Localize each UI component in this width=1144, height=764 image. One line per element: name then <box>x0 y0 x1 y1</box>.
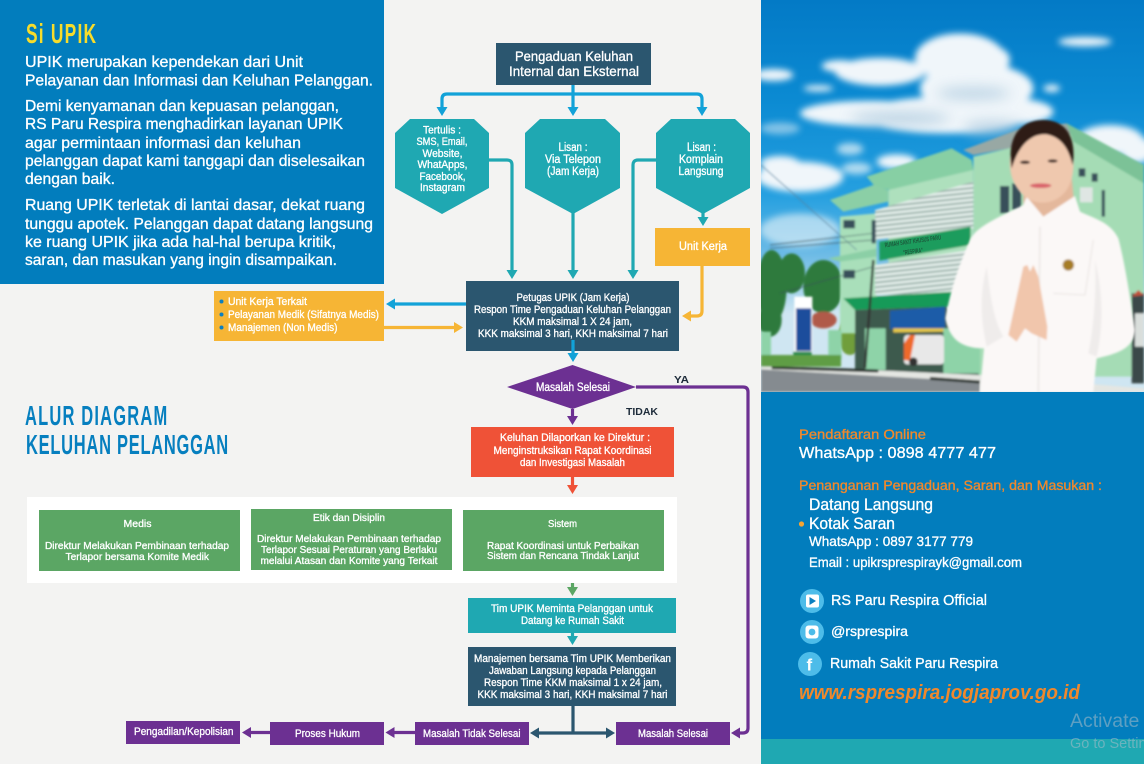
box: Petugas UPIK <box>466 281 679 351</box>
box: Sistem <box>463 510 664 571</box>
box: Petugas UPIK: KKK maksimal 3 hari, KKH maksimal 7 hari <box>478 328 668 340</box>
photo: hospital building and staff member <box>753 0 1144 392</box>
arrows: complaint source branches <box>436 85 708 116</box>
box: Tim UPIK: Tim UPIK Meminta Pelanggan untuk <box>491 603 653 615</box>
arrow: Unit Kerja to officer <box>682 266 702 322</box>
intro text: Demi kenyamanan dan kepuasan pelanggan, <box>25 98 339 115</box>
arrow: officer to decision <box>568 340 578 362</box>
box: Petugas UPIK: KKM maksimal 1 X 24 jam, <box>513 316 632 328</box>
box: Sistem: Rapat Koordinasi untuk Perbaikan <box>487 540 639 552</box>
hexagon: Tertulis: Instagram <box>420 182 465 194</box>
signboard <box>794 297 812 352</box>
box: Masalah Tidak Selesai: Masalah Tidak Selesai <box>423 728 520 740</box>
panel: follow-up categories <box>27 497 677 583</box>
box: Pengadilan/Kepolisian: Pengadilan/Kepolisian <box>134 726 234 738</box>
box: Manajemen bersama Tim UPIK: Jawaban Langsung kepada Pelanggan <box>489 665 656 677</box>
box: Tim UPIK <box>468 598 676 633</box>
hexagon: Lisan via telepon: Lisan : <box>558 142 588 154</box>
box: Pengaduan Keluhan: Pengaduan Keluhan <box>515 48 633 64</box>
box: Proses Hukum <box>270 722 384 745</box>
box: related units list: Pelayanan Medik (Sifatnya Medis) <box>228 309 379 321</box>
contact: complaints handling: WhatsApp : 0897 3177 779 <box>809 533 973 549</box>
box: Unit Kerja: Unit Kerja <box>679 241 728 253</box>
ambulance <box>904 335 944 364</box>
box: Etik dan Disiplin: Terlapor Sesuai Peraturan yang Berlaku <box>261 544 437 556</box>
box: Petugas UPIK: Petugas UPIK (Jam Kerja) <box>516 292 630 304</box>
box: Proses Hukum: Proses Hukum <box>295 728 360 740</box>
arrow: to Proses Hukum <box>386 727 415 738</box>
hexagon: Lisan komplain langsung <box>656 119 750 214</box>
arrow: YA path to Masalah Selesai <box>636 387 748 738</box>
panel: contact information <box>761 392 1144 764</box>
box: Masalah Selesai: Masalah Selesai <box>638 728 708 740</box>
box: Masalah Tidak Selesai <box>415 722 529 745</box>
icon: facebook: f <box>806 656 812 674</box>
poles <box>865 260 873 368</box>
decision: Masalah Selesai <box>507 365 636 409</box>
icon: facebook <box>798 652 822 676</box>
text: facebook: Rumah Sakit Paru Respira <box>830 655 999 672</box>
intro text <box>25 54 373 269</box>
box: Etik dan Disiplin: Etik dan Disiplin <box>313 512 385 524</box>
contact: complaints handling <box>799 477 1102 570</box>
box: Medis: Medis <box>124 518 152 530</box>
arrow: to Pengadilan <box>242 727 270 738</box>
road <box>761 365 1144 392</box>
heading: Alur Diagram Keluhan Pelanggan: ALUR DIAGRAM <box>25 400 167 431</box>
hexagon: Lisan komplain langsung: Komplain <box>679 154 723 166</box>
intro text: Pelayanan dan Informasi dan Keluhan Pelanggan. <box>25 72 373 90</box>
box: Pengadilan/Kepolisian <box>126 721 240 744</box>
intro text: dengan baik. <box>25 171 115 188</box>
icon: instagram <box>800 620 824 644</box>
box: Etik dan Disiplin: Direktur Melakukan Pembinaan terhadap <box>257 533 441 545</box>
building <box>761 123 1144 392</box>
panel: Si UPIK intro <box>0 0 384 284</box>
hexagon: Lisan komplain langsung: Lisan : <box>687 142 716 154</box>
box: Keluhan Dilaporkan ke Direktur <box>471 427 674 477</box>
intro text: saran, dan masukan yang ingin disampaikan. <box>25 252 337 269</box>
photo: hospital building and staff member: RUMAH SAKIT KHUSUS PARU <box>884 234 942 249</box>
box: Manajemen bersama Tim UPIK <box>468 647 676 706</box>
hexagon: Tertulis: WhatApps, <box>418 159 468 171</box>
hexagon: Lisan komplain langsung: Langsung <box>678 166 724 178</box>
photo: hospital building and staff member: "RESPIRA" <box>903 247 923 257</box>
heading: Si UPIK: Si UPIK <box>26 18 96 49</box>
intro text: RS Paru Respira menghadirkan layanan UPIK <box>25 116 343 133</box>
box: Masalah Selesai <box>616 722 730 745</box>
box: Keluhan Dilaporkan ke Direktur: dan Investigasi Masalah <box>520 457 625 469</box>
box: Medis: Terlapor bersama Komite Medik <box>66 551 210 563</box>
hexagon: Tertulis: Website, <box>422 148 462 160</box>
label: YA: YA <box>674 374 689 386</box>
hexagon: Tertulis: Facebook, <box>420 171 466 183</box>
arrow: report to follow-up <box>567 477 578 494</box>
hexagon: Tertulis: SMS, Email, <box>416 136 468 148</box>
arrow: UPIK team to management <box>567 633 578 645</box>
intro text: Ruang UPIK terletak di lantai dasar, dekat ruang <box>25 197 365 214</box>
box: related units list: Unit Kerja Terkait <box>228 296 307 308</box>
box: related units list: Manajemen (Non Medis) <box>228 322 338 334</box>
website link: www.rsprespira.jogjaprov.go.id <box>799 682 1081 704</box>
arrow: related units to officer <box>384 322 463 333</box>
box: Etik dan Disiplin: melalui Atasan dan Komite yang Terkait <box>260 555 438 567</box>
arrows: outcome split <box>530 706 615 738</box>
intro text: tunggu apotek. Pelanggan dapat datang langsung <box>25 216 373 233</box>
box: Sistem: Sistem <box>548 518 577 530</box>
watermark: activate windows <box>1070 713 1144 748</box>
contact: complaints handling: Datang Langsung <box>809 496 933 514</box>
heading: Alur Diagram Keluhan Pelanggan: KELUHAN PELANGGAN <box>26 429 228 460</box>
arrows: channels to UPIK officer <box>489 160 708 279</box>
contact: complaints handling: Email : upikrsprespirayk@gmail.com <box>809 555 1022 570</box>
box: Medis <box>39 510 240 571</box>
box: Pengaduan Keluhan <box>496 43 651 85</box>
contact: online registration: Pendaftaran Online <box>799 426 926 442</box>
box: Pengaduan Keluhan: Internal dan Eksternal <box>509 63 639 79</box>
box: Tim UPIK: Datang ke Rumah Sakit <box>521 615 624 627</box>
box: Keluhan Dilaporkan ke Direktur: Keluhan Dilaporkan ke Direktur : <box>500 432 650 444</box>
windows and details <box>843 168 1105 278</box>
box: Unit Kerja <box>655 228 750 266</box>
box: Manajemen bersama Tim UPIK: KKK maksimal 3 hari, KKH maksimal 7 hari <box>478 689 668 701</box>
contact: complaints handling: Penanganan Pengaduan, Saran, dan Masukan : <box>799 477 1102 493</box>
icon: video channel <box>800 589 824 613</box>
arrow: categories to UPIK team <box>567 583 578 596</box>
hexagon: Tertulis: Tertulis : <box>423 124 461 136</box>
trees <box>757 250 862 355</box>
intro text: agar permintaan informasi dan keluhan <box>25 135 301 152</box>
box: Petugas UPIK: Respon Time Pengaduan Keluhan Pelanggan <box>474 304 671 316</box>
text: instagram: @rsprespira <box>831 624 909 639</box>
heading: Alur Diagram Keluhan Pelanggan <box>25 400 228 460</box>
label: TIDAK: TIDAK <box>626 406 658 418</box>
box: Etik dan Disiplin <box>251 509 452 570</box>
decision: Masalah Selesai: Masalah Selesai <box>536 382 610 394</box>
box: Manajemen bersama Tim UPIK: Manajemen bersama Tim UPIK Memberikan <box>474 653 671 665</box>
box: Manajemen bersama Tim UPIK: Respon Time KKM maksimal 1 x 24 jam, <box>484 677 662 689</box>
hexagon: Lisan via telepon <box>525 119 620 214</box>
contact: online registration: WhatsApp : 0898 4777 477 <box>799 445 996 462</box>
text: video channel: RS Paru Respira Official <box>831 592 987 609</box>
box: Sistem: Sistem dan Rencana Tindak Lanjut <box>487 550 639 562</box>
arrow: officer to related units <box>386 298 466 310</box>
box: Medis: Direktur Melakukan Pembinaan terhadap <box>45 540 229 552</box>
hexagon: Lisan via telepon: Via Telepon <box>545 154 601 166</box>
intro text: pelanggan dapat kami tanggapi dan diselesaikan <box>25 153 365 170</box>
intro text: UPIK merupakan kependekan dari Unit <box>25 54 304 71</box>
person <box>945 120 1135 392</box>
box: related units list <box>214 291 384 341</box>
hexagon: Lisan via telepon: (Jam Kerja) <box>547 166 599 178</box>
contact: complaints handling: Kotak Saran <box>809 515 895 533</box>
box: Keluhan Dilaporkan ke Direktur: Menginstruksikan Rapat Koordinasi <box>494 445 652 457</box>
hexagon: Tertulis <box>395 119 489 214</box>
arrow: TIDAK to director report <box>567 409 578 425</box>
intro text: ke ruang UPIK jika ada hal-hal berupa kritik, <box>25 234 336 251</box>
contact: online registration <box>799 426 996 462</box>
